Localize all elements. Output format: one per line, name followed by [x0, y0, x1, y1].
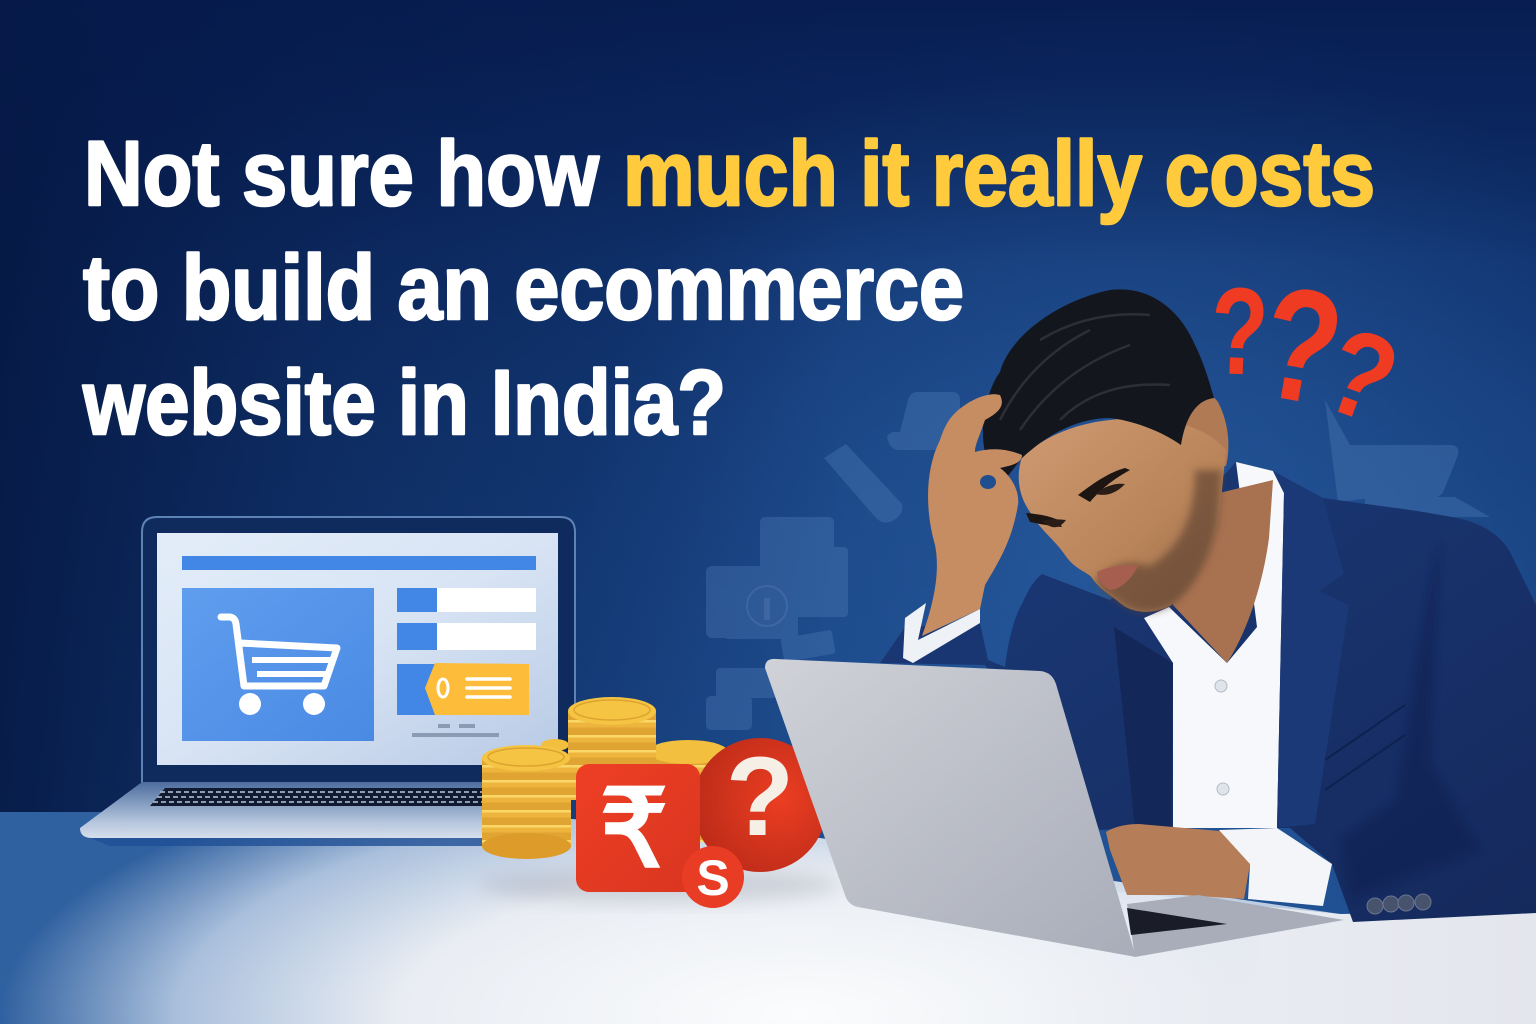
front laptop: [765, 659, 1344, 957]
title: [82, 123, 1375, 454]
sleeve shadow: [1340, 540, 1480, 900]
sleeve buttons: [1367, 894, 1431, 914]
question marks: [1208, 252, 1415, 451]
pocket: [1325, 705, 1405, 790]
faint background icons: [706, 392, 1490, 730]
icon: shopping cart: [221, 617, 337, 715]
back coins: [541, 739, 728, 842]
jacket left panel: [1114, 627, 1173, 828]
typing hand: [1106, 824, 1250, 899]
screen header bar: [182, 556, 536, 570]
small caption lines: [412, 724, 499, 737]
mouth: [1097, 565, 1138, 590]
laptop shadow: [90, 838, 500, 846]
jacket right lapel: [1273, 471, 1349, 828]
shirt: [1144, 462, 1284, 828]
list rows: [397, 588, 536, 715]
left laptop: [80, 517, 575, 846]
raised cuff: [903, 603, 980, 663]
question badge: ?: [726, 734, 794, 859]
shirt buttons: [1215, 680, 1229, 795]
hand gap: [980, 475, 996, 489]
rupee badge: ₹: [600, 768, 668, 889]
small S badge: S: [696, 850, 730, 906]
product hero panel: [182, 588, 374, 741]
question marks: ?: [1248, 252, 1355, 441]
neck: [1173, 480, 1273, 663]
laptop screen: [157, 533, 558, 765]
left coin stack: [482, 745, 571, 859]
hair strands: [1000, 314, 1170, 430]
raised hand: [922, 394, 1022, 636]
beard: [1095, 470, 1222, 612]
coin stacks and cost badges: [480, 697, 840, 908]
keyboard: [150, 788, 490, 806]
ear: [1181, 392, 1228, 470]
laptop lid: [765, 659, 1136, 957]
icon: price tag: [425, 663, 529, 715]
laptop lid: [142, 517, 575, 790]
laptop base: [80, 782, 500, 838]
coin shadow: [480, 867, 840, 903]
small S badge: [682, 846, 744, 908]
title: to build an ecommerce: [83, 237, 964, 339]
hair: [983, 289, 1214, 478]
title: much it really costs: [623, 123, 1375, 225]
person: [880, 289, 1536, 922]
title: website in India?: [82, 352, 726, 454]
title: Not sure how: [84, 123, 599, 225]
question marks: ?: [1208, 262, 1271, 402]
table: [0, 812, 1536, 1024]
laptop base: [1127, 895, 1344, 957]
eyes and brows: [1026, 468, 1130, 527]
center coin stack: [568, 697, 656, 800]
jacket: [880, 462, 1536, 922]
lower cuff: [1219, 828, 1332, 906]
rupee badge: [576, 764, 700, 892]
face: [1019, 418, 1226, 612]
question badge: [693, 734, 827, 872]
question marks: ?: [1308, 301, 1415, 451]
keyboard: [1127, 908, 1227, 935]
